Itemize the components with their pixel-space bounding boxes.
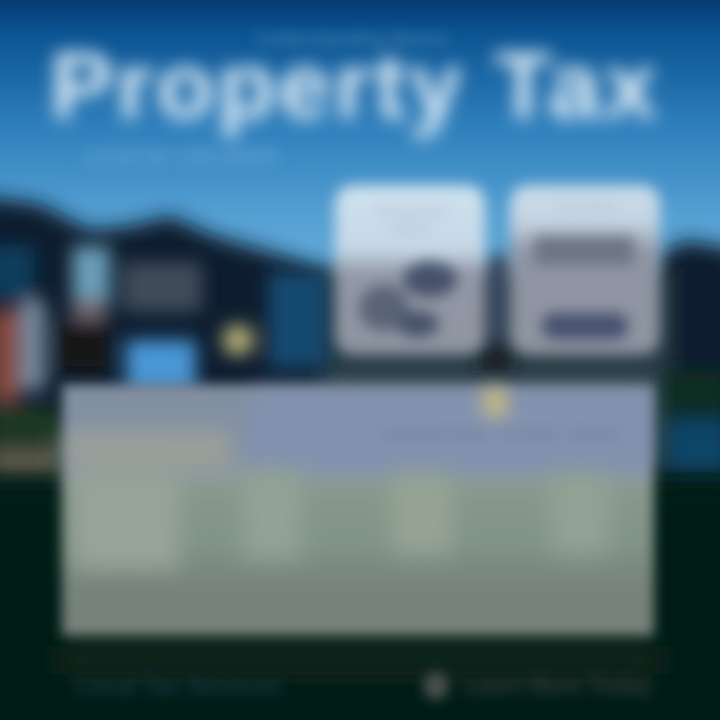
footer icon xyxy=(423,672,449,700)
mountains xyxy=(0,196,720,420)
header labels: Assessed Value Tax Rate Amount xyxy=(382,426,621,442)
sky xyxy=(0,0,720,300)
title: Property Tax xyxy=(50,33,660,139)
highlight marker xyxy=(482,386,508,418)
footer right xyxy=(417,667,652,706)
third column text xyxy=(392,474,452,554)
card heading: Assessed Value xyxy=(375,203,445,238)
card background xyxy=(510,185,660,355)
table left header xyxy=(62,430,232,472)
top small heading: Understanding Basics xyxy=(255,28,450,50)
subtitle: Local tax calculated xyxy=(84,142,277,167)
ground xyxy=(0,486,720,720)
card dark button xyxy=(542,313,628,339)
table header band xyxy=(252,390,654,468)
panel background xyxy=(62,384,654,636)
houses xyxy=(0,245,720,474)
card: right xyxy=(500,175,670,364)
card dark blob bottom xyxy=(397,311,439,337)
second column text xyxy=(242,469,302,559)
footer band xyxy=(60,645,660,675)
card text lines xyxy=(534,235,634,265)
footer left text: Local Tax Services xyxy=(76,673,281,699)
card heading: Tax Rate xyxy=(554,199,616,216)
card background xyxy=(335,185,485,355)
table panel xyxy=(47,372,671,644)
card: left xyxy=(325,174,495,364)
footer right text: Learn More Today xyxy=(464,673,652,698)
card dark blob left xyxy=(359,285,409,331)
fourth column text xyxy=(550,474,610,554)
card dark blob top xyxy=(403,261,457,297)
first column text xyxy=(74,474,179,569)
